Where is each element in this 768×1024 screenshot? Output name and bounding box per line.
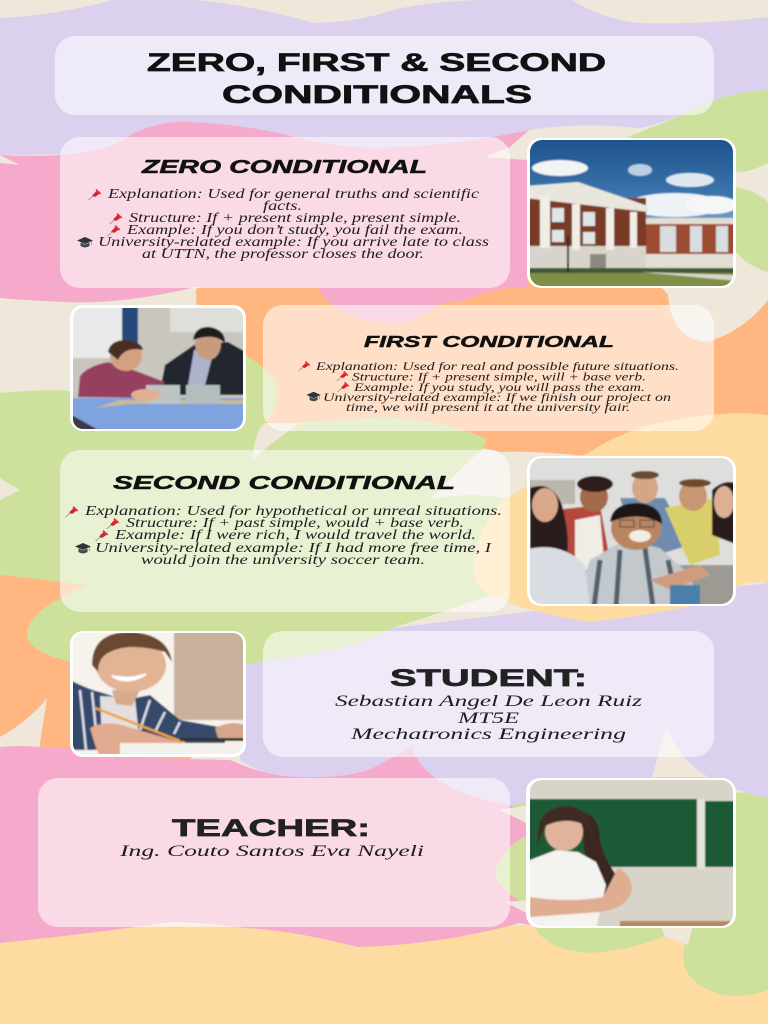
panel: teacher bbox=[38, 778, 510, 927]
panel: second conditional: Explanation: Used for hypothetical or unreal situations. bbox=[84, 503, 502, 518]
panel: first conditional bbox=[263, 305, 714, 431]
photo: group of students selfie bbox=[525, 455, 738, 607]
photo: teacher and student with models bbox=[70, 305, 246, 431]
panel: zero conditional: Structure: If + present simple, present simple. bbox=[129, 210, 461, 225]
panel: first conditional: Explanation: Used for real and possible future situations. bbox=[315, 360, 679, 373]
panel: student: Sebastian Angel De Leon Ruiz bbox=[335, 693, 643, 710]
panel: student: Mechatronics Engineering bbox=[349, 726, 626, 743]
panel: student: MT5E bbox=[456, 710, 519, 727]
panel: second conditional bbox=[60, 450, 510, 612]
photo: teacher at blackboard bbox=[525, 775, 738, 930]
panel: student: STUDENT: bbox=[390, 665, 587, 692]
title panel: CONDITIONALS bbox=[222, 81, 532, 109]
panel: second conditional: would join the university soccer team. bbox=[141, 552, 425, 567]
panel: first conditional: FIRST CONDITIONAL bbox=[364, 334, 614, 351]
panel: zero conditional: at UTTN, the professor closes the door. bbox=[142, 246, 424, 261]
title panel: ZERO, FIRST & SECOND bbox=[147, 49, 606, 77]
panel: zero conditional: University-related example: If you arrive late to class bbox=[98, 234, 489, 249]
panel: first conditional: University-related example: If we finish our project on bbox=[323, 391, 671, 404]
panel: teacher: Ing. Couto Santos Eva Nayeli bbox=[118, 843, 424, 860]
panel: second conditional: University-related example: If I had more free time, I bbox=[95, 540, 492, 555]
panel: student bbox=[263, 631, 714, 757]
title panel bbox=[55, 36, 714, 115]
panel: zero conditional: Explanation: Used for general truths and scientific bbox=[107, 186, 479, 201]
panel: second conditional: Example: If I were rich, I would travel the world. bbox=[114, 527, 476, 542]
photo: university building bbox=[525, 135, 739, 290]
panel: zero conditional: facts. bbox=[263, 198, 302, 213]
photo: student writing bbox=[70, 630, 246, 757]
panel: first conditional: Structure: If + present simple, will + base verb. bbox=[352, 370, 646, 384]
panel: second conditional: SECOND CONDITIONAL bbox=[113, 472, 455, 493]
panel: zero conditional: ZERO CONDITIONAL bbox=[140, 156, 427, 177]
panel: first conditional: time, we will present it at the university fair. bbox=[346, 401, 630, 414]
panel: teacher: TEACHER: bbox=[172, 815, 370, 842]
panel: zero conditional: Example: If you don’t study, you fail the exam. bbox=[126, 222, 463, 237]
panel: first conditional: Example: If you study, you will pass the exam. bbox=[353, 381, 645, 394]
panel: second conditional: Structure: If + past simple, would + base verb. bbox=[126, 515, 464, 530]
panel: zero conditional bbox=[60, 137, 510, 288]
